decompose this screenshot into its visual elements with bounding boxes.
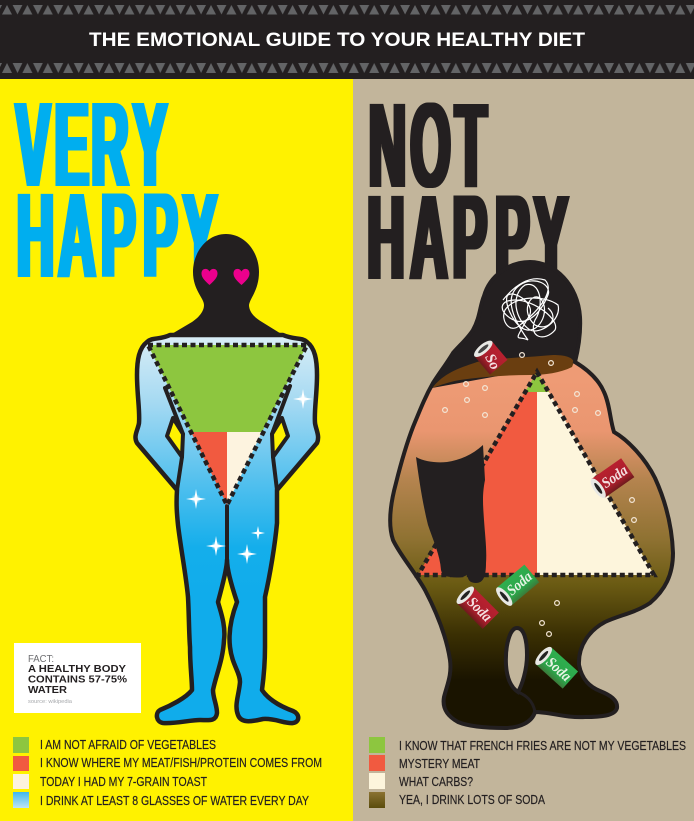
fact box: WATER xyxy=(28,684,67,696)
body outline xyxy=(390,262,673,728)
food triangle: cream xyxy=(537,392,654,575)
legend: very happy xyxy=(13,737,322,808)
soda level band xyxy=(432,355,574,388)
heading: very happy xyxy=(16,77,217,303)
fact box: source: wikipedia xyxy=(28,699,73,705)
heading: very happy: VERY xyxy=(16,77,167,212)
can: red, at shoulder xyxy=(472,338,508,375)
food triangle: dashed outline xyxy=(148,345,307,505)
arm xyxy=(416,445,486,583)
body silhouette fill xyxy=(390,262,673,728)
heading: not happy: HAPPY xyxy=(367,170,568,305)
can: red, at shoulder: So xyxy=(481,351,503,373)
food triangle: cream xyxy=(227,432,262,505)
can: red, at right xyxy=(588,458,634,500)
figure: unhappy person xyxy=(390,262,673,728)
fact box: A HEALTHY BODY xyxy=(28,663,126,675)
can: red, in belly xyxy=(454,584,499,629)
can: green, on triangle base: Soda xyxy=(504,569,536,599)
fact box: FACT: xyxy=(28,654,54,665)
black head region xyxy=(431,262,580,389)
fact box: CONTAINS 57-75% xyxy=(28,674,128,686)
can: red, in belly: Soda xyxy=(464,594,495,626)
can: green, on triangle base xyxy=(493,565,539,608)
can: green, in leg: Soda xyxy=(542,654,574,685)
icon: heart eye left xyxy=(202,269,218,285)
soda bubbles xyxy=(443,353,636,636)
foot separation line xyxy=(518,692,535,712)
gap between legs xyxy=(506,628,527,692)
right beige panel background xyxy=(353,79,694,821)
legend: not happy: YEA, I DRINK LOTS OF SODA xyxy=(399,793,546,807)
food triangle: green xyxy=(525,372,549,392)
heading: very happy: HAPPY xyxy=(17,168,217,303)
icon: tangled scribble thoughts xyxy=(502,279,558,340)
title: THE EMOTIONAL GUIDE TO YOUR HEALTHY DIET xyxy=(89,29,585,51)
body silhouette filled with water xyxy=(135,335,318,723)
header banner xyxy=(0,0,694,79)
legend: very happy: I AM NOT AFRAID OF VEGETABLES xyxy=(40,738,216,752)
heading: not happy: NOT xyxy=(369,78,487,213)
legend: not happy xyxy=(369,737,686,808)
food triangle: dashed outline xyxy=(418,372,654,575)
icons: sparkles xyxy=(186,389,313,564)
fact box xyxy=(14,643,141,713)
icon: heart eye right xyxy=(234,269,250,285)
head and shoulders xyxy=(170,234,283,335)
can: red, at right: Soda xyxy=(599,462,631,492)
legend: very happy: I KNOW WHERE MY MEAT/FISH/PROTEIN COMES FROM xyxy=(40,756,322,770)
food triangle: green xyxy=(148,345,307,432)
heading: not happy xyxy=(367,78,568,305)
figure: happy person xyxy=(135,234,318,723)
arm and torso lines xyxy=(165,386,290,560)
armpit gaps xyxy=(167,418,288,457)
legend: very happy: TODAY I HAD MY 7-GRAIN TOAST xyxy=(40,775,207,789)
can: green, in leg xyxy=(533,644,578,689)
left yellow panel background xyxy=(0,79,353,821)
legend: not happy: WHAT CARBS? xyxy=(399,775,473,789)
legend: very happy: I DRINK AT LEAST 8 GLASSES OF WATER EVERY DAY xyxy=(40,794,310,808)
food triangle: red xyxy=(418,392,537,575)
food triangle: red xyxy=(191,432,227,505)
legend: not happy: MYSTERY MEAT xyxy=(399,757,480,771)
